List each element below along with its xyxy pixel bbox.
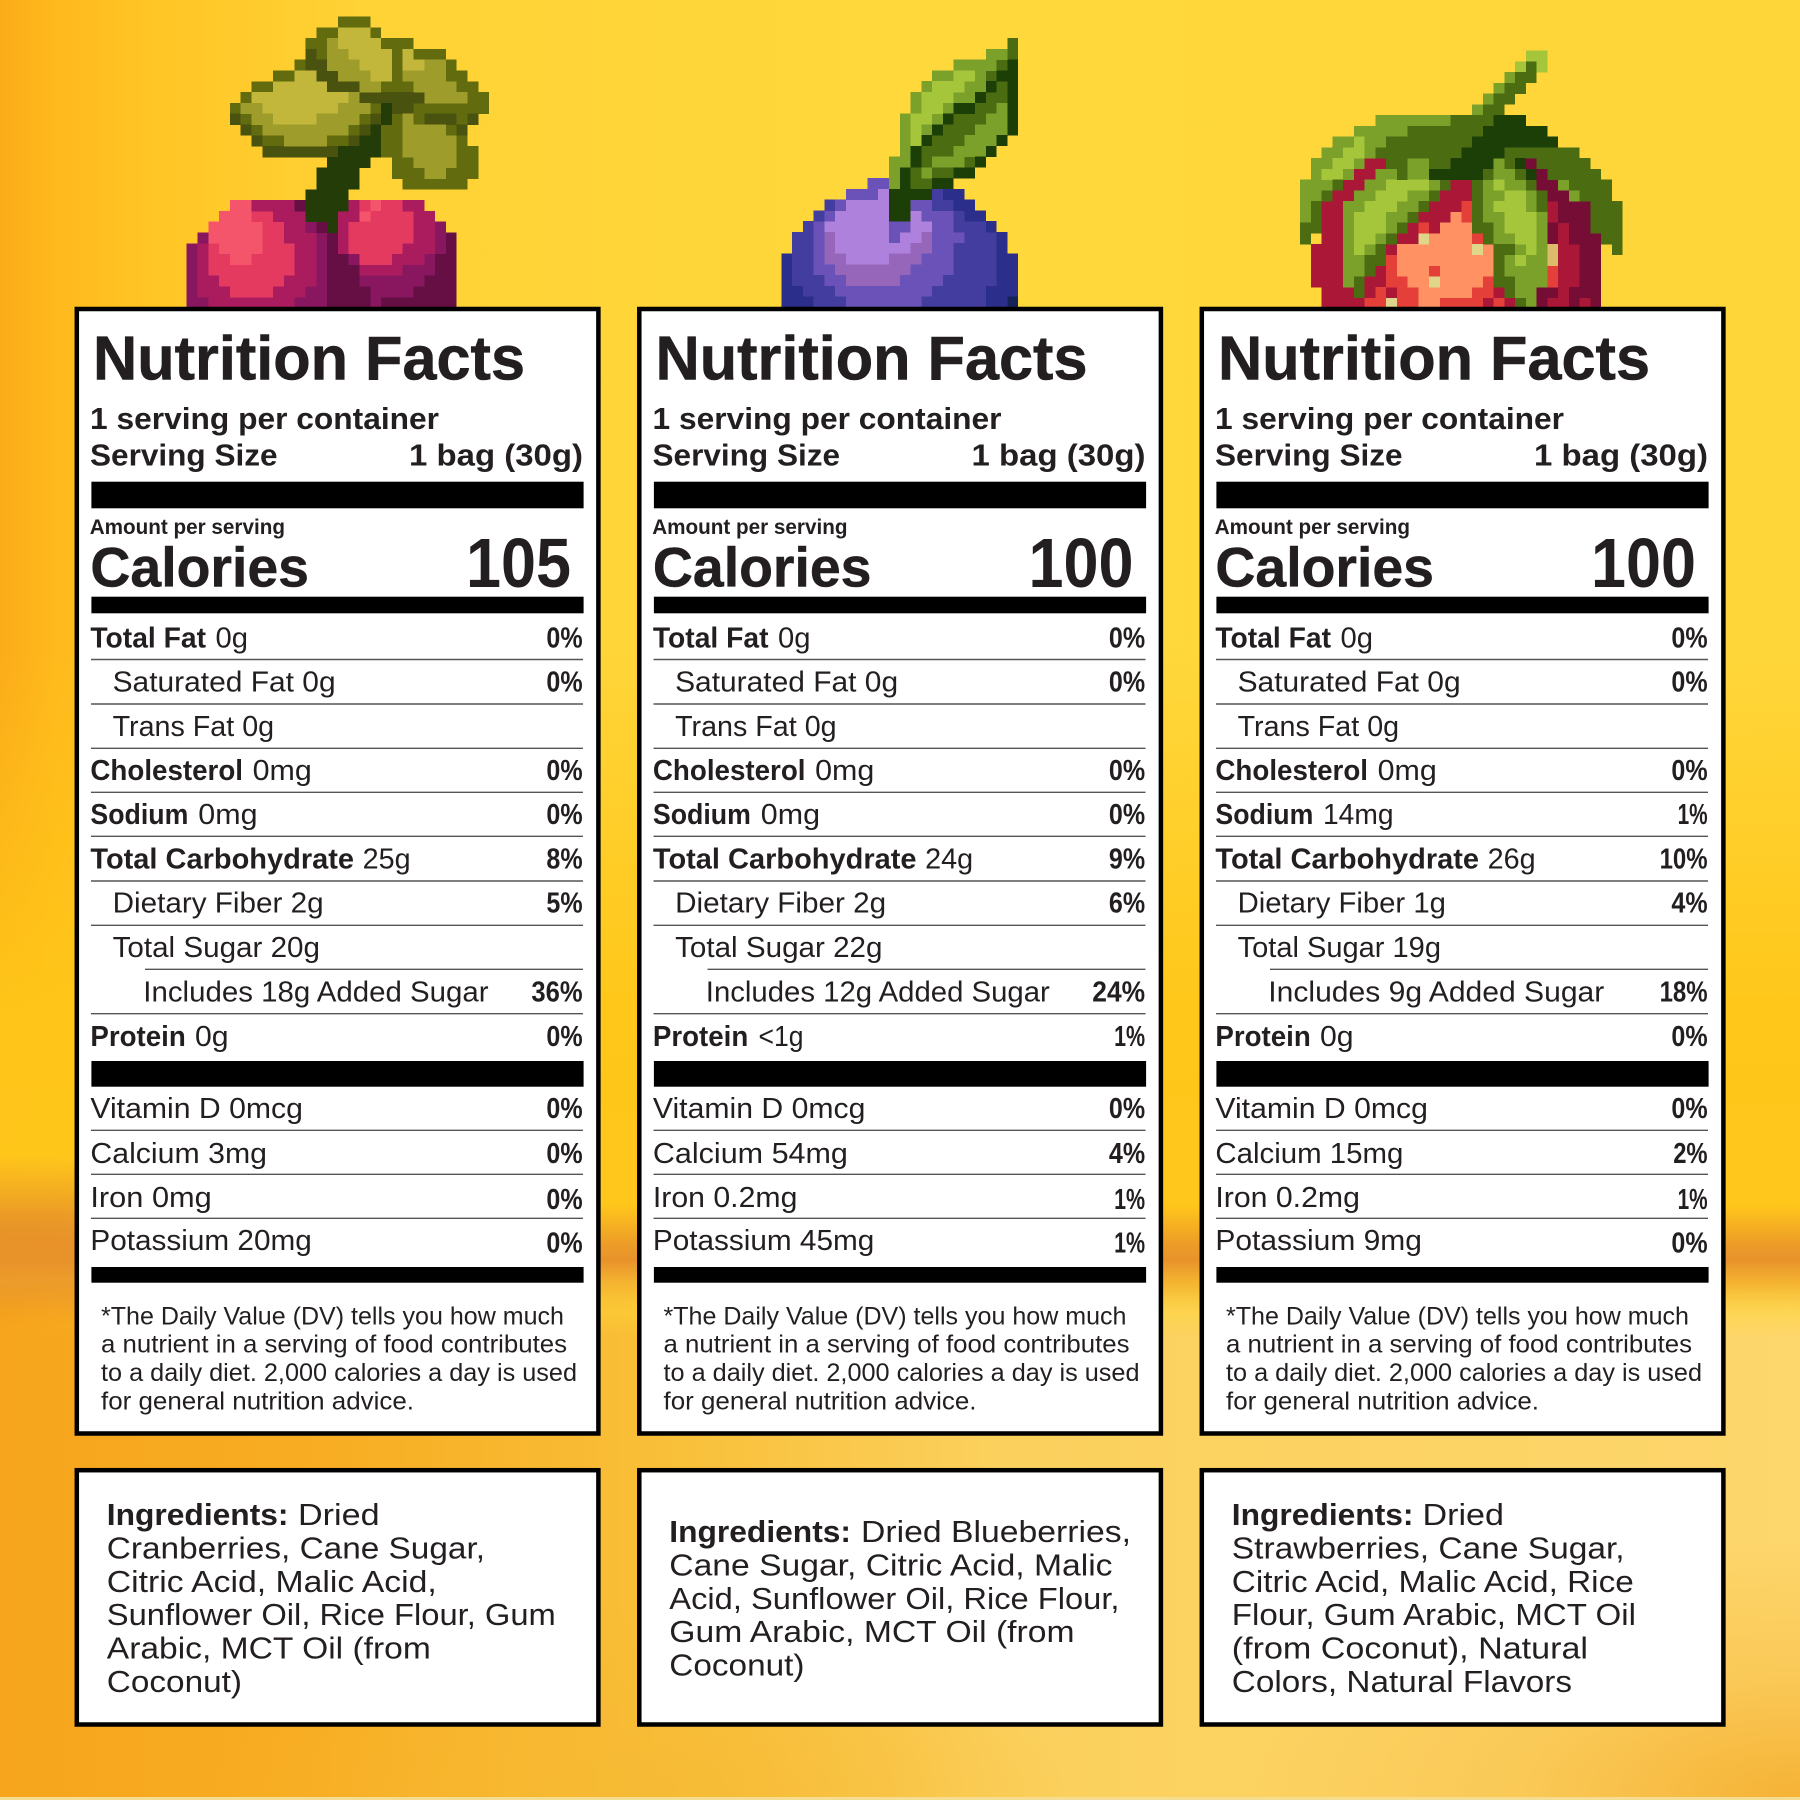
row: potassium: 1% bbox=[1114, 1227, 1145, 1259]
row: vitamin d: 0% bbox=[1109, 1093, 1145, 1125]
row: protein bbox=[1215, 1021, 1708, 1053]
footnote: *The Daily Value (DV) tells you how much bbox=[664, 1302, 1126, 1330]
footnote: *The Daily Value (DV) tells you how much bbox=[101, 1302, 564, 1330]
row: cholesterol bbox=[90, 755, 583, 787]
background saturated yellow middle bbox=[0, 650, 1800, 1250]
row: total fat: 0g bbox=[216, 622, 248, 654]
row: potassium: Potassium 45mg bbox=[653, 1225, 874, 1257]
background lower centre shade bbox=[200, 1600, 1100, 1800]
row: vitamin d bbox=[90, 1093, 583, 1125]
row: total carbohydrate: 24g bbox=[925, 843, 973, 875]
row: protein: 1% bbox=[1114, 1021, 1145, 1053]
row: saturated fat: 0% bbox=[1671, 667, 1708, 699]
row: dietary fiber: Dietary Fiber 2g bbox=[675, 888, 886, 920]
row: iron bbox=[1215, 1182, 1708, 1216]
row: vitamin d: Vitamin D 0mcg bbox=[90, 1093, 303, 1125]
background lower pale area bbox=[0, 1285, 1800, 1800]
row: sodium: 0% bbox=[546, 799, 583, 831]
row: iron: 1% bbox=[1114, 1184, 1145, 1216]
row: sodium: Sodium bbox=[653, 799, 751, 831]
footnote: for general nutrition advice. bbox=[1226, 1387, 1539, 1415]
row: potassium: 0% bbox=[546, 1227, 583, 1259]
row: vitamin d: Vitamin D 0mcg bbox=[653, 1093, 865, 1125]
row: sodium: Sodium bbox=[1215, 799, 1313, 831]
row: total fat: 0% bbox=[1671, 622, 1708, 654]
row: protein: <1g bbox=[758, 1021, 804, 1053]
calories: Calories bbox=[90, 536, 309, 598]
row: potassium bbox=[1215, 1225, 1708, 1260]
panel: strawberry nutrition facts bbox=[1202, 309, 1723, 1434]
panel: blueberry ingredients: Cane Sugar, Citric Acid, Malic bbox=[669, 1548, 1113, 1582]
row: total fat: Total Fat bbox=[653, 622, 769, 654]
row: sodium: 14mg bbox=[1323, 799, 1394, 831]
calories: 105 bbox=[466, 524, 571, 602]
panel: cranberry ingredients: Coconut) bbox=[107, 1664, 242, 1699]
row: total carbohydrate: Total Carbohydrate bbox=[1215, 843, 1479, 875]
panel: blueberry ingredients: Coconut) bbox=[669, 1647, 804, 1682]
row: vitamin d bbox=[653, 1093, 1145, 1125]
row: added sugar: 18% bbox=[1660, 977, 1708, 1009]
background left orange glow bbox=[0, 1130, 900, 1380]
calories bbox=[1215, 516, 1696, 602]
serving info: Serving Size bbox=[90, 438, 278, 473]
row: trans fat: Trans Fat 0g bbox=[675, 711, 837, 743]
row: potassium: Potassium 20mg bbox=[90, 1225, 312, 1257]
calories bbox=[90, 516, 571, 602]
row: vitamin d bbox=[1215, 1093, 1708, 1125]
row: calcium: 0% bbox=[546, 1138, 583, 1170]
row: saturated fat bbox=[675, 666, 1145, 698]
panel: blueberry ingredients: Dried Blueberries, bbox=[861, 1514, 1131, 1549]
row: dietary fiber bbox=[113, 888, 583, 920]
serving info: 1 serving per container bbox=[652, 401, 1002, 436]
panel: cranberry ingredients: Citric Acid, Malic Acid, bbox=[107, 1564, 437, 1599]
background lower right shade bbox=[1000, 1400, 1800, 1800]
footnote: to a daily diet. 2,000 calories a day is used bbox=[664, 1359, 1140, 1387]
row: sodium: Sodium bbox=[90, 799, 188, 831]
footnote: a nutrient in a serving of food contributes bbox=[1226, 1331, 1692, 1359]
row: potassium bbox=[653, 1225, 1145, 1260]
row: potassium: 0% bbox=[1671, 1227, 1708, 1259]
footnote: to a daily diet. 2,000 calories a day is used bbox=[101, 1359, 577, 1387]
serving info: 1 bag (30g) bbox=[409, 438, 583, 473]
row: sodium bbox=[1215, 799, 1708, 831]
row: total carbohydrate bbox=[1215, 843, 1708, 875]
row: cholesterol bbox=[1215, 755, 1708, 787]
row: iron: 1% bbox=[1678, 1184, 1708, 1216]
row: total carbohydrate bbox=[653, 843, 1145, 875]
row: cholesterol bbox=[653, 755, 1145, 787]
footnote: for general nutrition advice. bbox=[664, 1387, 976, 1415]
panel: cranberry ingredients bbox=[77, 1470, 598, 1724]
row: total fat: 0% bbox=[1109, 622, 1145, 654]
row: total carbohydrate: Total Carbohydrate bbox=[90, 843, 354, 875]
row: dietary fiber bbox=[1238, 888, 1708, 920]
row: dietary fiber: Dietary Fiber 1g bbox=[1238, 888, 1446, 920]
row: protein: 0g bbox=[1320, 1021, 1354, 1053]
row: iron: Iron 0.2mg bbox=[653, 1182, 797, 1214]
row: added sugar: Includes 9g Added Sugar bbox=[1268, 977, 1605, 1009]
icon: pixel cranberries bbox=[187, 22, 489, 303]
background bottom strip bbox=[0, 1797, 1800, 1800]
panel: strawberry ingredients: Flour, Gum Arabic, MCT Oil bbox=[1232, 1597, 1636, 1632]
row: cholesterol: 0% bbox=[1109, 755, 1145, 787]
row: dietary fiber: 5% bbox=[546, 888, 583, 920]
serving info: Serving Size bbox=[652, 438, 840, 473]
panel: cranberry ingredients: Ingredients: bbox=[107, 1497, 288, 1532]
row: cholesterol: 0mg bbox=[253, 755, 312, 787]
row: protein: Protein bbox=[653, 1021, 748, 1053]
panel: blueberry ingredients: Acid, Sunflower Oil, Rice Flour, bbox=[669, 1581, 1120, 1616]
row: protein: Protein bbox=[90, 1021, 186, 1053]
row: saturated fat: Saturated Fat 0g bbox=[1238, 667, 1461, 699]
calories: Calories bbox=[1215, 536, 1434, 598]
row: saturated fat: 0% bbox=[1109, 667, 1145, 699]
row: dietary fiber: 4% bbox=[1671, 888, 1708, 920]
background orange band bbox=[0, 1205, 1800, 1315]
row: protein: 0% bbox=[1671, 1021, 1708, 1053]
heading: Nutrition Facts bbox=[1218, 324, 1650, 393]
panel: strawberry ingredients: Citric Acid, Malic Acid, Rice bbox=[1232, 1564, 1634, 1599]
row: sodium: 0% bbox=[1109, 799, 1145, 831]
row: added sugar: 36% bbox=[531, 977, 583, 1009]
row: total fat: 0% bbox=[546, 622, 583, 654]
row: total sugar: Total Sugar 22g bbox=[675, 932, 882, 964]
calories: 100 bbox=[1028, 524, 1134, 602]
row: dietary fiber bbox=[675, 888, 1145, 920]
serving info bbox=[652, 401, 1146, 473]
row: cholesterol: Cholesterol bbox=[90, 755, 243, 787]
row: iron: Iron 0.2mg bbox=[1215, 1182, 1360, 1214]
row: total fat: Total Fat bbox=[1215, 622, 1331, 654]
footnote: a nutrient in a serving of food contributes bbox=[101, 1331, 567, 1359]
panel: cranberry ingredients: Sunflower Oil, Rice Flour, Gum bbox=[107, 1597, 556, 1632]
row: cholesterol: Cholesterol bbox=[653, 755, 806, 787]
row: dietary fiber: Dietary Fiber 2g bbox=[113, 888, 324, 920]
panel: strawberry ingredients: (from Coconut), Natural bbox=[1232, 1630, 1588, 1666]
serving info: 1 bag (30g) bbox=[1534, 438, 1708, 473]
row: calcium: 4% bbox=[1109, 1138, 1145, 1170]
row: total carbohydrate: 9% bbox=[1109, 843, 1145, 875]
panel: cranberry ingredients: Cranberries, Cane Sugar, bbox=[107, 1530, 485, 1566]
calories: Amount per serving bbox=[1215, 516, 1410, 539]
row: sodium: 0mg bbox=[761, 799, 820, 831]
row: total carbohydrate: 8% bbox=[546, 843, 583, 875]
row: trans fat: Trans Fat 0g bbox=[1238, 711, 1399, 743]
row: cholesterol: 0mg bbox=[1378, 755, 1437, 787]
row: calcium: Calcium 3mg bbox=[90, 1138, 267, 1170]
row: added sugar: 24% bbox=[1092, 977, 1145, 1009]
heading: Nutrition Facts bbox=[656, 324, 1088, 393]
row: protein bbox=[90, 1021, 583, 1053]
footnote: to a daily diet. 2,000 calories a day is used bbox=[1226, 1359, 1702, 1387]
row: cholesterol: 0mg bbox=[815, 755, 874, 787]
row: sodium: 0mg bbox=[198, 799, 258, 831]
row: saturated fat bbox=[1238, 666, 1708, 698]
footnote: a nutrient in a serving of food contributes bbox=[664, 1331, 1130, 1359]
row: cholesterol: 0% bbox=[1671, 755, 1708, 787]
footnote bbox=[1226, 1302, 1702, 1415]
row: potassium: Potassium 9mg bbox=[1215, 1225, 1422, 1257]
row: potassium bbox=[90, 1225, 583, 1260]
calories: 100 bbox=[1591, 524, 1696, 602]
row: sodium bbox=[90, 799, 583, 831]
panel: strawberry ingredients: Ingredients: bbox=[1232, 1497, 1414, 1532]
row: vitamin d: Vitamin D 0mcg bbox=[1215, 1093, 1428, 1125]
row: total carbohydrate: 26g bbox=[1488, 843, 1536, 875]
row: vitamin d: 0% bbox=[546, 1093, 583, 1125]
panel: blueberry ingredients bbox=[639, 1470, 1161, 1724]
row: added sugar: Includes 12g Added Sugar bbox=[706, 977, 1050, 1009]
row: saturated fat: Saturated Fat 0g bbox=[675, 667, 898, 699]
row: total fat bbox=[653, 622, 1145, 654]
row: protein: 0% bbox=[546, 1021, 583, 1053]
footnote bbox=[664, 1302, 1140, 1415]
row: total fat: 0g bbox=[778, 622, 810, 654]
row: total sugar: Total Sugar 19g bbox=[1238, 932, 1441, 964]
icon: pixel blueberry bbox=[781, 44, 1018, 302]
row: saturated fat bbox=[113, 666, 583, 698]
panel: strawberry ingredients: Colors, Natural Flavors bbox=[1232, 1664, 1572, 1699]
row: calcium bbox=[1215, 1138, 1708, 1170]
row: calcium: 2% bbox=[1673, 1138, 1708, 1170]
serving info: 1 bag (30g) bbox=[972, 438, 1146, 473]
row: total carbohydrate: Total Carbohydrate bbox=[653, 843, 917, 875]
row: sodium bbox=[653, 799, 1145, 831]
panel: strawberry ingredients bbox=[1202, 1470, 1723, 1724]
row: sodium: 1% bbox=[1678, 799, 1708, 831]
row: iron bbox=[653, 1182, 1145, 1216]
row: iron: 0% bbox=[546, 1184, 583, 1216]
row: calcium bbox=[90, 1138, 583, 1170]
row: total fat: Total Fat bbox=[90, 622, 206, 654]
calories: Amount per serving bbox=[90, 516, 285, 539]
panel: strawberry ingredients: Dried bbox=[1422, 1497, 1504, 1532]
row: protein: 0g bbox=[195, 1021, 229, 1053]
row: total carbohydrate: 10% bbox=[1660, 843, 1708, 875]
row: protein: Protein bbox=[1215, 1021, 1311, 1053]
row: total fat: 0g bbox=[1340, 622, 1373, 654]
serving info: 1 serving per container bbox=[90, 401, 439, 436]
serving info: Serving Size bbox=[1215, 438, 1403, 473]
row: iron: Iron 0mg bbox=[90, 1182, 212, 1214]
row: total carbohydrate bbox=[90, 843, 583, 875]
calories: Calories bbox=[653, 536, 872, 598]
serving info bbox=[90, 401, 583, 473]
calories: Amount per serving bbox=[652, 516, 848, 539]
row: saturated fat: 0% bbox=[546, 667, 583, 699]
row: protein bbox=[653, 1021, 1145, 1053]
panel: cranberry nutrition facts bbox=[77, 309, 598, 1434]
row: total fat bbox=[90, 622, 583, 654]
row: dietary fiber: 6% bbox=[1109, 888, 1145, 920]
row: saturated fat: Saturated Fat 0g bbox=[113, 667, 336, 699]
panel: blueberry nutrition facts bbox=[639, 309, 1161, 1434]
row: total fat bbox=[1215, 622, 1708, 654]
row: vitamin d: 0% bbox=[1671, 1093, 1708, 1125]
heading: Nutrition Facts bbox=[93, 324, 525, 393]
footnote: for general nutrition advice. bbox=[101, 1387, 414, 1415]
row: cholesterol: Cholesterol bbox=[1215, 755, 1368, 787]
panel: cranberry ingredients: Dried bbox=[298, 1497, 380, 1532]
footnote bbox=[101, 1302, 577, 1415]
panel: blueberry ingredients: Gum Arabic, MCT Oil (from bbox=[669, 1614, 1075, 1649]
row: trans fat: Trans Fat 0g bbox=[113, 711, 274, 743]
row: calcium bbox=[653, 1138, 1145, 1170]
row: added sugar: Includes 18g Added Sugar bbox=[143, 977, 489, 1009]
panel: strawberry ingredients: Strawberries, Cane Sugar, bbox=[1232, 1530, 1625, 1566]
panel: cranberry ingredients: Arabic, MCT Oil (from bbox=[107, 1630, 431, 1666]
row: calcium: Calcium 54mg bbox=[653, 1138, 848, 1170]
serving info: 1 serving per container bbox=[1215, 401, 1564, 436]
panel: blueberry ingredients: Ingredients: bbox=[669, 1514, 851, 1549]
footnote: *The Daily Value (DV) tells you how much bbox=[1226, 1302, 1689, 1330]
icon: pixel strawberry bbox=[1300, 56, 1622, 303]
row: iron bbox=[90, 1182, 583, 1216]
row: total carbohydrate: 25g bbox=[363, 843, 411, 875]
serving info bbox=[1215, 401, 1708, 473]
row: cholesterol: 0% bbox=[546, 755, 583, 787]
calories bbox=[652, 516, 1134, 602]
row: total sugar: Total Sugar 20g bbox=[113, 932, 320, 964]
row: calcium: Calcium 15mg bbox=[1215, 1138, 1403, 1170]
